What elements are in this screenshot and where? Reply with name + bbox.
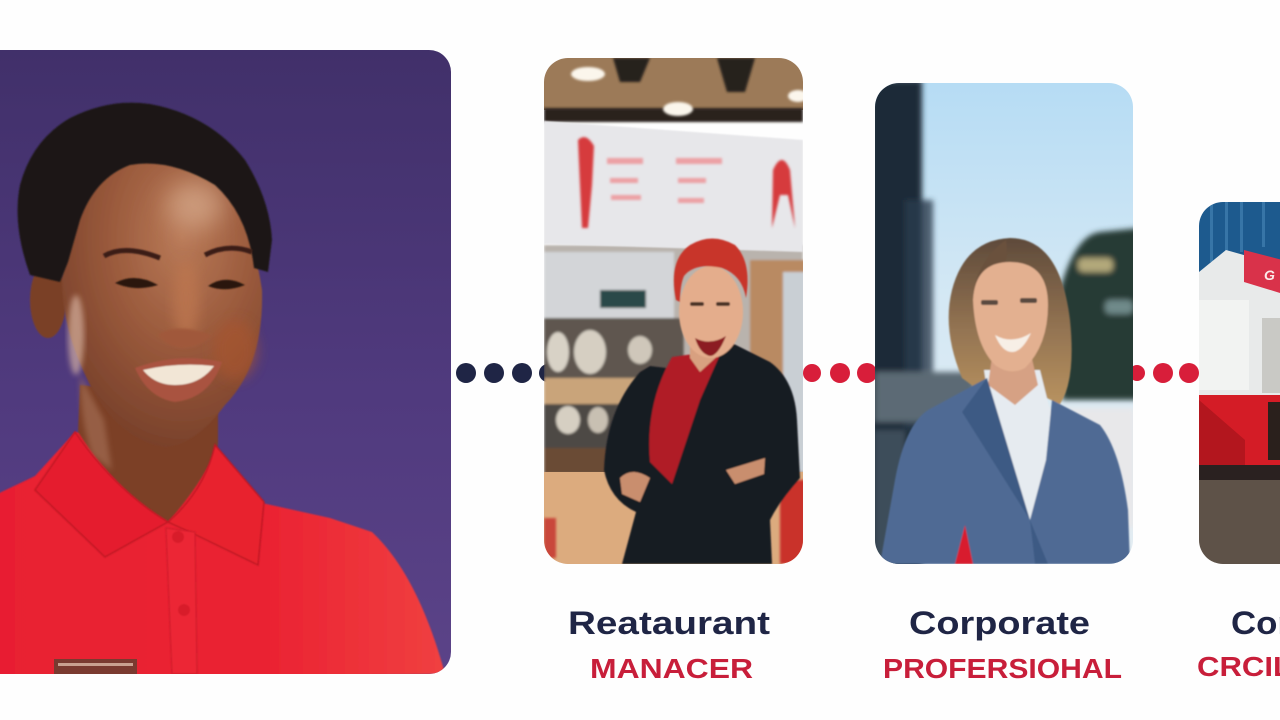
menu board [544,121,803,252]
neck highlight [80,375,112,470]
white truck body [1199,250,1280,400]
label: third role cropped [1197,605,1280,682]
ground [1199,465,1280,480]
label: third role cropped: CRCIL [1197,651,1280,682]
placket [166,528,197,674]
panel: creative photo cropped at edge [1199,202,1280,564]
face [62,148,262,447]
blue grid backdrop [1210,202,1265,262]
ear [29,276,66,339]
connector dots: red between manager and corporate [803,363,877,383]
white truck body: G [1264,267,1275,283]
red truck band [1199,395,1280,465]
connector dots: navy [456,363,557,383]
blurred city background [870,80,1140,580]
panel: corporate professional photo [870,80,1140,580]
label: corporate professional: Corporate [909,605,1090,641]
floor [544,472,805,564]
panel: crew member portrait [0,50,451,680]
smile [135,358,222,402]
connector dots: red between corporate and creative [1129,363,1199,383]
hair [18,103,272,282]
collar [35,432,264,565]
label: corporate professional: PROFERSIOHAL [883,653,1122,684]
name badge [54,659,137,674]
brows and eyes [104,248,252,289]
neck [78,385,218,522]
back wall [544,245,805,475]
person: corporate woman [880,238,1130,564]
label: restaurant manager: MANACER [590,653,753,684]
label: restaurant manager: Reataurant [568,605,770,641]
label: corporate professional [883,605,1122,684]
ceiling [544,58,803,110]
label: restaurant manager [568,605,770,684]
person: manager [604,238,800,564]
panel: restaurant manager photo [544,58,808,564]
shirt [0,432,445,680]
